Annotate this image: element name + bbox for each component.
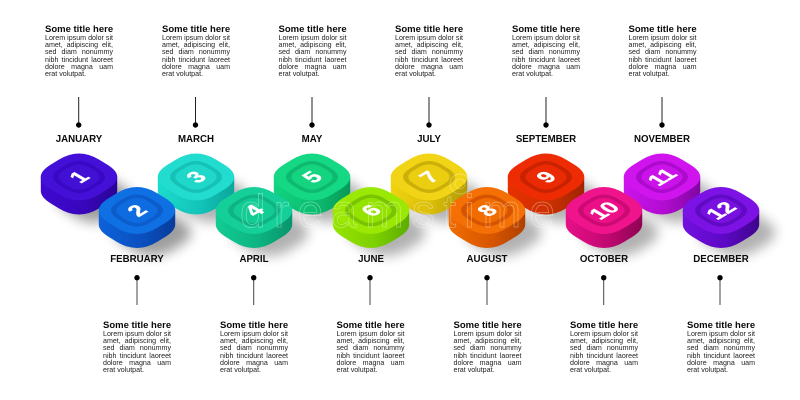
text block: August: [454, 320, 522, 374]
text block: May: amet, adipiscing elit,: [278, 41, 346, 49]
text block: December: [687, 320, 755, 374]
connector: August: [484, 275, 490, 305]
text block: October: Lorem ipsum dolor sit: [570, 330, 638, 338]
text block: May: sed diam nonummy: [278, 48, 346, 56]
text block: November: amet, adipiscing elit,: [628, 41, 696, 49]
text block: February: [103, 320, 171, 374]
text block: January: nibh tincidunt laoreet: [45, 56, 113, 64]
connector: February: [134, 275, 140, 305]
text block: March: [162, 24, 230, 78]
text block: October: nibh tincidunt laoreet: [570, 352, 638, 360]
text block: December: erat volutpat.: [687, 366, 728, 374]
text block: March: dolore magna uam: [162, 63, 230, 71]
text block: February: nibh tincidunt laoreet: [103, 352, 171, 360]
text block: September: sed diam nonummy: [512, 48, 580, 56]
text block: December: Some title here: [687, 320, 755, 331]
text block: January: sed diam nonummy: [45, 48, 113, 56]
tile 8: [449, 187, 541, 256]
text block: November: Lorem ipsum dolor sit: [628, 34, 696, 42]
label: September: SEPTEMBER: [516, 134, 576, 145]
tile 12: 12: [700, 198, 742, 223]
text block: January: Some title here: [45, 24, 113, 35]
tile 4: [216, 187, 308, 256]
text block: December: Lorem ipsum dolor sit: [687, 330, 755, 338]
text block: March: erat volutpat.: [162, 70, 203, 78]
text block: October: amet, adipiscing elit,: [570, 337, 638, 345]
text block: June: dolore magna uam: [336, 359, 404, 367]
text block: September: Lorem ipsum dolor sit: [512, 34, 580, 42]
text block: June: [336, 320, 405, 374]
connector: April: [251, 275, 256, 305]
text block: January: dolore magna uam: [45, 63, 113, 71]
text block: September: amet, adipiscing elit,: [512, 41, 580, 49]
text block: June: Lorem ipsum dolor sit: [336, 330, 404, 338]
text block: May: Some title here: [278, 24, 347, 35]
text block: February: sed diam nonummy: [103, 344, 171, 352]
text block: May: erat volutpat.: [278, 70, 320, 78]
text block: May: Lorem ipsum dolor sit: [278, 34, 346, 42]
text block: August: dolore magna uam: [454, 359, 522, 367]
text block: November: erat volutpat.: [628, 70, 670, 78]
text block: August: amet, adipiscing elit,: [454, 337, 522, 345]
tile 8: 8: [471, 201, 503, 220]
tile 9: [508, 154, 600, 222]
connector: June: [367, 275, 373, 305]
text block: November: [628, 24, 697, 78]
text block: July: erat volutpat.: [395, 70, 436, 78]
text block: July: nibh tincidunt laoreet: [395, 56, 463, 64]
connector: May: [309, 97, 315, 128]
text block: April: sed diam nonummy: [220, 344, 288, 352]
text block: February: erat volutpat.: [103, 366, 144, 374]
text block: February: Lorem ipsum dolor sit: [103, 330, 171, 338]
text block: September: erat volutpat.: [512, 70, 553, 78]
tile 1: [41, 154, 133, 222]
text block: February: dolore magna uam: [103, 359, 171, 367]
text block: July: dolore magna uam: [395, 63, 463, 71]
text block: June: sed diam nonummy: [336, 344, 404, 352]
text block: March: Some title here: [162, 24, 230, 35]
tile 9: 9: [530, 168, 562, 186]
connector: March: [193, 97, 198, 128]
text block: April: dolore magna uam: [220, 359, 288, 367]
tile 6: [333, 187, 425, 256]
text block: December: amet, adipiscing elit,: [687, 337, 755, 345]
text block: March: nibh tincidunt laoreet: [162, 56, 230, 64]
connector: July: [426, 97, 432, 128]
text block: April: [220, 320, 288, 374]
connector: November: [659, 97, 665, 128]
tile 6: 6: [355, 201, 387, 220]
text block: April: nibh tincidunt laoreet: [220, 352, 288, 360]
label: December: DECEMBER: [693, 254, 749, 265]
text block: September: [512, 24, 580, 78]
text block: February: amet, adipiscing elit,: [103, 337, 171, 345]
text block: December: dolore magna uam: [687, 359, 755, 367]
text block: April: Some title here: [220, 320, 288, 331]
text block: September: Some title here: [512, 24, 580, 35]
text block: August: Some title here: [454, 320, 522, 331]
text block: January: [45, 24, 113, 78]
tile 1: 1: [63, 168, 95, 186]
text block: May: dolore magna uam: [278, 63, 346, 71]
label: July: JULY: [417, 134, 441, 145]
text block: June: erat volutpat.: [336, 366, 378, 374]
text block: July: amet, adipiscing elit,: [395, 41, 463, 49]
label: August: AUGUST: [467, 254, 507, 265]
text block: January: erat volutpat.: [45, 70, 86, 78]
text block: October: sed diam nonummy: [570, 344, 638, 352]
text block: July: Some title here: [395, 24, 463, 35]
connector: January: [76, 97, 81, 128]
text block: January: Lorem ipsum dolor sit: [45, 34, 113, 42]
text block: August: sed diam nonummy: [454, 344, 522, 352]
text block: December: nibh tincidunt laoreet: [687, 352, 755, 360]
tile 4: 4: [238, 201, 270, 220]
text block: March: amet, adipiscing elit,: [162, 41, 230, 49]
text block: June: amet, adipiscing elit,: [336, 337, 404, 345]
text block: May: nibh tincidunt laoreet: [278, 56, 346, 64]
text block: October: Some title here: [570, 320, 638, 331]
label: June: JUNE: [358, 254, 384, 265]
text block: April: amet, adipiscing elit,: [220, 337, 288, 345]
text block: October: dolore magna uam: [570, 359, 638, 367]
text block: February: Some title here: [103, 320, 171, 331]
text block: July: [395, 24, 463, 78]
tile 2: 2: [121, 201, 153, 220]
text block: July: Lorem ipsum dolor sit: [395, 34, 463, 42]
text block: October: [570, 320, 638, 374]
label: March: MARCH: [178, 134, 214, 145]
text block: October: erat volutpat.: [570, 366, 611, 374]
text block: March: Lorem ipsum dolor sit: [162, 34, 230, 42]
tile 5: 5: [296, 168, 328, 186]
tile 7: [391, 154, 483, 222]
connector: December: [717, 275, 723, 305]
text block: December: sed diam nonummy: [687, 344, 755, 352]
text block: May: [278, 24, 347, 78]
text block: January: amet, adipiscing elit,: [45, 41, 113, 49]
text block: November: sed diam nonummy: [628, 48, 696, 56]
tile 12: [683, 187, 775, 256]
tile 10: 10: [583, 198, 625, 223]
text block: November: Some title here: [628, 24, 697, 35]
tile 3: 3: [180, 168, 212, 186]
text block: June: Some title here: [336, 320, 405, 331]
text block: November: dolore magna uam: [628, 63, 696, 71]
text block: June: nibh tincidunt laoreet: [336, 352, 404, 360]
connector: September: [543, 97, 549, 128]
connector: October: [601, 275, 606, 305]
text block: September: nibh tincidunt laoreet: [512, 56, 580, 64]
text block: August: nibh tincidunt laoreet: [454, 352, 522, 360]
tile 11: 11: [641, 165, 683, 189]
text block: August: erat volutpat.: [454, 366, 495, 374]
text block: November: nibh tincidunt laoreet: [628, 56, 696, 64]
tile 7: 7: [413, 168, 445, 186]
text block: April: Lorem ipsum dolor sit: [220, 330, 288, 338]
tile 11: [624, 154, 716, 222]
text block: August: Lorem ipsum dolor sit: [454, 330, 522, 338]
tile 2: [99, 187, 191, 256]
label: April: APRIL: [239, 254, 269, 265]
text block: July: sed diam nonummy: [395, 48, 463, 56]
label: February: FEBRUARY: [110, 254, 164, 265]
text block: September: dolore magna uam: [512, 63, 580, 71]
label: January: JANUARY: [56, 134, 102, 145]
label: October: OCTOBER: [580, 254, 628, 265]
tile 5: [274, 154, 366, 222]
watermark: dreamstime: [240, 185, 555, 237]
tile 10: [566, 187, 658, 256]
tile 3: [158, 154, 250, 222]
text block: March: sed diam nonummy: [162, 48, 230, 56]
label: May: MAY: [302, 134, 322, 145]
label: November: NOVEMBER: [634, 134, 690, 145]
text block: April: erat volutpat.: [220, 366, 261, 374]
